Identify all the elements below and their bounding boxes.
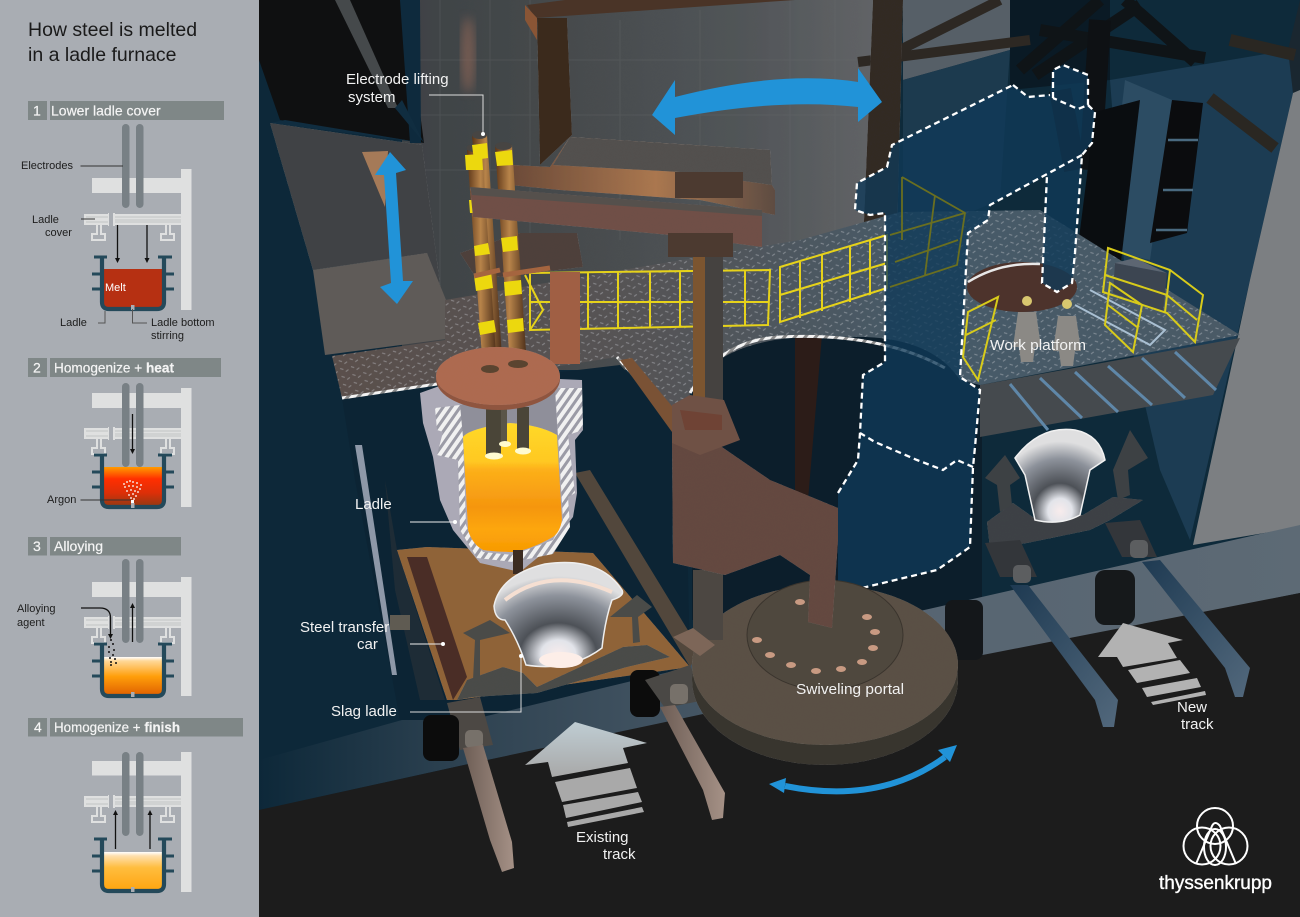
upper arm <box>510 137 775 215</box>
label: steel transfer car: car <box>357 636 378 653</box>
label: existing track: Existing <box>576 829 629 846</box>
portal body <box>672 432 838 628</box>
step 1 diagram <box>21 124 215 342</box>
electrode stack <box>465 131 550 370</box>
arrow: portal swing top <box>652 68 882 135</box>
right ladle <box>1015 429 1105 522</box>
dark opening top left <box>259 0 424 143</box>
portal column base <box>673 570 723 656</box>
rails right <box>945 560 1250 727</box>
label: ladle <box>60 311 105 329</box>
logo: thyssenkrupp: thyssenkrupp <box>1159 873 1272 894</box>
label: steel transfer car: Steel transfer <box>300 619 389 636</box>
label: electrodes: Electrodes <box>21 160 73 172</box>
label: new track: New <box>1177 699 1207 716</box>
label: new track: track <box>1181 716 1214 733</box>
step 3 diagram <box>17 559 192 697</box>
existing track arrow <box>525 722 647 827</box>
right upper bay <box>892 0 1300 600</box>
back wall <box>402 0 892 370</box>
step 1 heading <box>28 101 224 120</box>
label: ladle cover: cover <box>45 227 72 239</box>
step 2 heading: 2 <box>33 360 41 376</box>
label: ladle: Ladle <box>60 317 87 329</box>
platform hole <box>967 262 1077 312</box>
pit left dark area <box>342 365 690 720</box>
ghost fence <box>890 177 965 287</box>
step 3 heading: 3 <box>33 538 41 554</box>
step 3 heading <box>28 537 181 556</box>
label: argon: Argon <box>47 494 76 506</box>
yellow fences on main platform <box>525 235 887 330</box>
alloying particles <box>108 639 117 666</box>
rails left <box>463 705 725 872</box>
label: existing track: track <box>603 846 636 863</box>
label: slag ladle: Slag ladle <box>331 703 397 720</box>
ghost outline of the portal in new position <box>838 65 1095 628</box>
portal column <box>672 257 740 455</box>
title: in a ladle furnace <box>28 44 177 66</box>
logo: thyssenkrupp <box>1159 808 1272 894</box>
label: slag ladle <box>331 654 523 720</box>
step 1 heading: Lower ladle cover <box>51 102 161 118</box>
label: ladle <box>355 496 457 524</box>
step 1 heading: 1 <box>33 102 41 118</box>
swivel disc <box>692 580 958 765</box>
lower arm <box>470 187 762 247</box>
workers <box>1013 296 1081 366</box>
slag ladle <box>494 562 623 668</box>
top gantry beam and column <box>525 0 795 165</box>
label: alloying agent <box>17 603 113 639</box>
arrow: electrode lift vertical <box>375 152 413 304</box>
new track arrow <box>1098 623 1206 705</box>
floor <box>259 593 1300 917</box>
label: existing track <box>576 829 636 863</box>
ladle cross-section <box>420 375 583 574</box>
label: ladle cover: Ladle <box>32 214 59 226</box>
title: How steel is melted <box>28 19 197 41</box>
step 1 diagram: Melt <box>105 282 126 294</box>
label: work platform: Work platform <box>990 337 1086 354</box>
step 2 heading: Homogenize + heat <box>54 360 174 376</box>
left panel: process steps <box>0 0 259 917</box>
car buffers left <box>390 615 705 761</box>
transfer car left <box>355 358 700 700</box>
roof trusses <box>858 0 1295 170</box>
label: alloying agent: Alloying <box>17 603 56 615</box>
argon bubbles <box>123 480 142 503</box>
step 4 heading: Homogenize + finish <box>54 719 180 735</box>
dark mass behind ghost right <box>1075 100 1140 270</box>
label: argon <box>47 494 131 506</box>
floor slab <box>259 525 1300 810</box>
work platform box and fences <box>963 248 1203 380</box>
label: ladle: Ladle <box>355 496 392 513</box>
smoke plume <box>461 17 475 93</box>
step 4 diagram <box>84 752 192 892</box>
label: ladle cover <box>32 214 95 239</box>
ladle lid <box>436 347 560 410</box>
label: steel transfer car <box>300 619 445 653</box>
under platform slab with rails <box>980 338 1240 437</box>
label: ladle bottom stirring: stirring <box>151 330 184 342</box>
lower bay dark <box>692 330 982 620</box>
rust column behind <box>795 335 822 500</box>
car holder right <box>985 430 1157 583</box>
step 4 heading: 4 <box>34 719 42 735</box>
arrow: swivel rotation <box>769 745 957 793</box>
label: electrode lifting system <box>346 71 485 136</box>
label: swiveling portal: Swiveling portal <box>796 681 904 698</box>
arm clamps <box>668 172 743 257</box>
rear column <box>863 0 903 245</box>
car holder left <box>457 595 670 700</box>
diamond plate platform <box>332 210 1240 433</box>
label: electrode lifting system: system <box>348 89 396 106</box>
step 3 heading: Alloying <box>54 538 103 554</box>
step 2 heading <box>28 358 221 377</box>
label: new track <box>1177 699 1214 733</box>
side frame bracket <box>460 233 583 364</box>
label: alloying agent: agent <box>17 617 45 629</box>
step 4 heading <box>28 718 243 736</box>
label: electrode lifting system: Electrode lifting <box>346 71 449 88</box>
label: ladle bottom stirring <box>132 309 215 342</box>
step 2 diagram <box>47 383 192 508</box>
label: ladle bottom stirring: Ladle bottom <box>151 317 215 329</box>
label: electrodes <box>21 160 123 172</box>
left concrete block <box>270 123 461 355</box>
